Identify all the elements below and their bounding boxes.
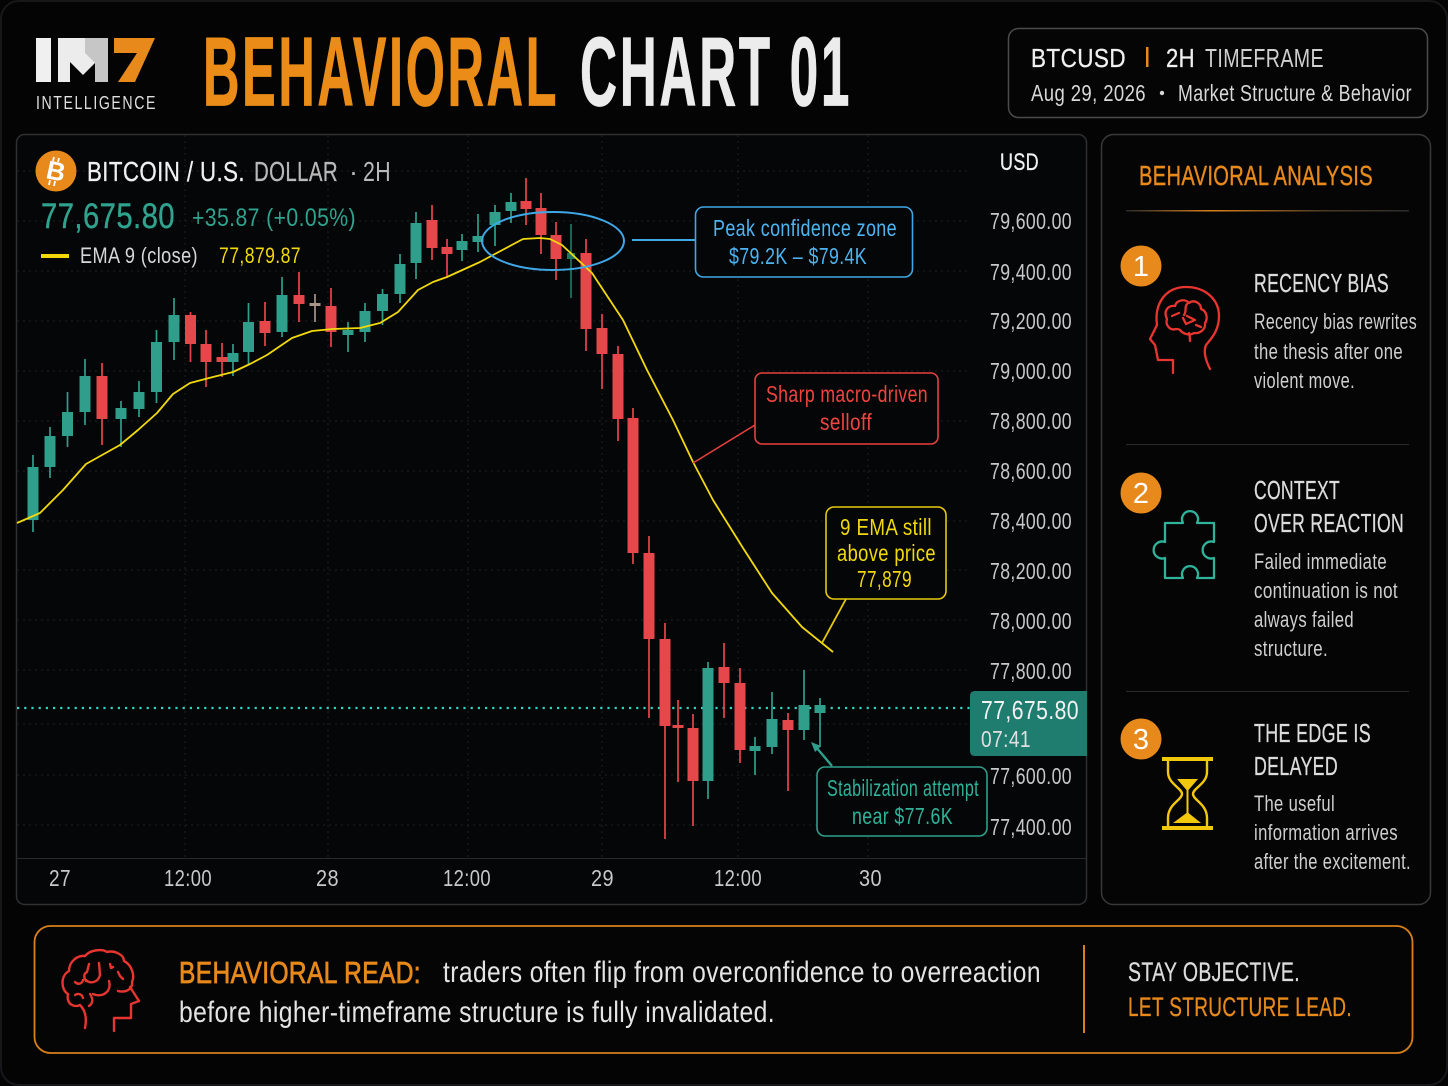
y axis labels: 78,600.00: [990, 458, 1072, 484]
panel: price chart: [16, 134, 1087, 904]
chart header: pair name: 2H: [363, 156, 391, 187]
item 2 text: continuation is not: [1254, 578, 1398, 603]
banner text: [179, 956, 1041, 1029]
icon: brain head: [62, 950, 139, 1031]
banner slogan: LET STRUCTURE LEAD.: [1128, 992, 1352, 1022]
y axis labels: 78,800.00: [990, 408, 1072, 434]
badge 2: 2: [1133, 478, 1149, 510]
current price tag: [970, 691, 1087, 756]
item 3 heading: DELAYED: [1254, 751, 1338, 781]
y axis labels: USD: [1000, 149, 1039, 176]
item 2 text: Failed immediate: [1254, 549, 1387, 574]
callout: peak confidence zone: [696, 207, 912, 277]
x axis labels: 12:00: [443, 865, 491, 891]
item 2 text: [1254, 549, 1398, 661]
item 1 heading: RECENCY BIAS: [1254, 268, 1389, 298]
EMA legend: EMA 9 (close): [80, 243, 198, 268]
item 3 text: The useful: [1254, 791, 1335, 816]
header info box: TIMEFRAME: [1205, 43, 1324, 73]
item 1: recency bias: [1120, 246, 1417, 393]
callout: sharp selloff: selloff: [820, 409, 872, 435]
x axis labels: 28: [316, 865, 339, 891]
y axis labels: 77,600.00: [990, 763, 1072, 789]
header info box: BTCUSD: [1031, 43, 1126, 73]
price change: +35.87 (+0.05%): [192, 204, 356, 232]
y axis labels: 79,400.00: [990, 259, 1072, 285]
callout: sharp selloff: [693, 373, 938, 463]
callout: 9 EMA above price: 9 EMA still: [840, 514, 932, 540]
icon: puzzle piece: [1154, 511, 1214, 578]
callout: sharp selloff: Sharp macro-driven: [766, 381, 928, 407]
y axis labels: 78,000.00: [990, 608, 1072, 634]
item 3: the edge is delayed: [1120, 718, 1411, 874]
banner heading: BEHAVIORAL READ:: [179, 955, 421, 990]
badge 1: [1120, 246, 1162, 286]
x axis labels: [49, 865, 882, 891]
title: BEHAVIORAL: [203, 16, 559, 126]
chart header: pair name: DOLLAR: [254, 156, 338, 187]
item 3 heading: [1254, 718, 1371, 781]
icon: hourglass: [1162, 759, 1213, 828]
axis line: [17, 858, 1086, 860]
candlesticks: [33, 178, 820, 839]
x axis labels: 30: [859, 865, 882, 891]
callout: peak confidence zone: $79.2K – $79.4K: [729, 243, 867, 269]
panel: behavioral analysis: [1102, 134, 1430, 904]
y axis labels: 77,400.00: [990, 814, 1072, 840]
y axis labels: 78,200.00: [990, 558, 1072, 584]
header info box: Aug 29, 2026: [1031, 80, 1146, 106]
chart header: pair name: ·: [349, 157, 358, 187]
chart header: pair name: [87, 156, 391, 187]
banner text: before higher-timeframe structure is fully invalidated.: [179, 996, 775, 1029]
item 2: context over reaction: [1120, 472, 1404, 661]
badge 1: 1: [1133, 251, 1149, 283]
header info box: [1008, 28, 1428, 118]
y axis labels: 79,000.00: [990, 358, 1072, 384]
banner slogan: [1128, 957, 1352, 1022]
chart header: pair name: BITCOIN / U.S.: [87, 156, 245, 187]
header info box: 2H: [1166, 43, 1195, 73]
item 1 text: [1254, 309, 1417, 393]
x axis labels: 27: [49, 865, 71, 891]
callout: peak confidence zone: Peak confidence zone: [713, 215, 897, 241]
x axis labels: 12:00: [714, 865, 762, 891]
current price dotted line: [17, 707, 970, 709]
y axis labels: 79,600.00: [990, 208, 1072, 234]
item 3 text: [1254, 791, 1411, 874]
item 3 heading: THE EDGE IS: [1254, 718, 1371, 748]
EMA legend: 77,879.87: [219, 243, 301, 268]
callout: stabilization attempt: near $77.6K: [852, 803, 953, 829]
item 1 text: violent move.: [1254, 368, 1355, 393]
peak zone ellipse and connector: [482, 212, 695, 270]
callout: 9 EMA above price: [822, 507, 946, 643]
callout: 9 EMA above price: above price: [837, 540, 936, 566]
x axis labels: 29: [591, 865, 614, 891]
logo: IM7 Intelligence: [36, 38, 157, 113]
EMA 9 line: [17, 238, 833, 652]
icon: head with brain: [1150, 287, 1219, 373]
y axis labels: 79,200.00: [990, 308, 1072, 334]
chart header: bitcoin symbol: B: [44, 154, 68, 188]
badge 2: [1120, 472, 1162, 514]
y axis labels: 77,800.00: [990, 658, 1072, 684]
item 2 heading: CONTEXT: [1254, 475, 1340, 505]
callout: stabilization attempt: [811, 742, 987, 836]
x axis labels: 12:00: [164, 865, 212, 891]
y axis labels: 78,400.00: [990, 508, 1072, 534]
item 2 text: always failed: [1254, 607, 1354, 632]
badge 3: [1120, 718, 1162, 760]
y axis labels: [990, 149, 1072, 840]
callout: 9 EMA above price: 77,879: [857, 566, 912, 592]
banner text: traders often flip from overconfidence to overreaction: [443, 956, 1041, 989]
item 2 heading: [1254, 475, 1404, 538]
current price tag: 77,675.80: [981, 695, 1079, 725]
current price: 77,675.80: [41, 197, 175, 236]
item 2 text: structure.: [1254, 636, 1328, 661]
logo: IM7 Intelligence: INTELLIGENCE: [36, 93, 157, 113]
title: CHART 01: [580, 16, 852, 126]
panel: behavioral read banner: [34, 926, 1412, 1053]
callout: stabilization attempt: Stabilization attempt: [827, 775, 979, 801]
item 3 text: information arrives: [1254, 820, 1398, 845]
chart header: bitcoin symbol: [36, 150, 76, 192]
banner slogan: STAY OBJECTIVE.: [1128, 957, 1300, 987]
current price tag: 07:41: [981, 726, 1031, 752]
chart grid: [17, 135, 970, 858]
EMA legend: [41, 243, 301, 268]
badge 3: 3: [1133, 724, 1149, 756]
